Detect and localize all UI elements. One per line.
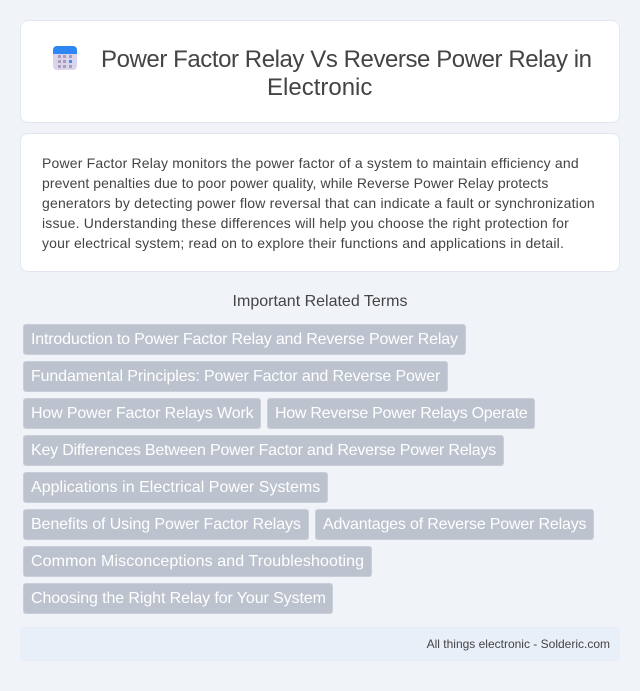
tag xyxy=(23,435,504,466)
title: Electronic xyxy=(267,74,372,101)
tag: Common Misconceptions and Troubleshooting xyxy=(31,553,364,570)
tag xyxy=(267,398,535,429)
tag: Choosing the Right Relay for Your System xyxy=(31,590,326,607)
tag: How Reverse Power Relays Operate xyxy=(275,405,527,422)
summary text: issue. Understanding these differences will help you choose the right protection for xyxy=(42,215,569,231)
summary text: generators by detecting power flow reversal that can indicate a fault or synchronization xyxy=(42,195,595,211)
summary text: prevent penalties due to poor power quality, while Reverse Power Relay protects xyxy=(42,175,548,191)
title xyxy=(101,46,592,101)
tag xyxy=(315,509,594,540)
tag xyxy=(23,472,328,503)
tag: Benefits of Using Power Factor Relays xyxy=(31,516,301,533)
tag xyxy=(23,509,309,540)
icon: calendar xyxy=(53,46,77,70)
footer bar xyxy=(20,627,620,661)
tag xyxy=(23,398,261,429)
summary text xyxy=(42,155,595,251)
tag xyxy=(23,546,372,577)
footer text: All things electronic - Solderic.com xyxy=(427,637,610,651)
tag: Key Differences Between Power Factor and Reverse Power Relays xyxy=(31,442,496,459)
tag xyxy=(23,583,333,614)
summary text: your electrical system; read on to explore their functions and applications in detail. xyxy=(42,235,564,251)
summary text: Power Factor Relay monitors the power factor of a system to maintain efficiency and xyxy=(42,155,579,171)
tag xyxy=(23,361,448,392)
tag: How Power Factor Relays Work xyxy=(31,405,254,422)
tag xyxy=(23,324,466,355)
tag list xyxy=(23,324,594,614)
tag: Advantages of Reverse Power Relays xyxy=(323,516,586,533)
summary panel xyxy=(20,133,620,272)
tag: Fundamental Principles: Power Factor and Reverse Power xyxy=(31,368,440,385)
header panel xyxy=(20,20,620,123)
tag: Applications in Electrical Power Systems xyxy=(31,479,320,496)
related terms heading: Important Related Terms xyxy=(233,293,407,310)
tag: Introduction to Power Factor Relay and Reverse Power Relay xyxy=(31,331,458,348)
title: Power Factor Relay Vs Reverse Power Relay in xyxy=(101,46,592,73)
